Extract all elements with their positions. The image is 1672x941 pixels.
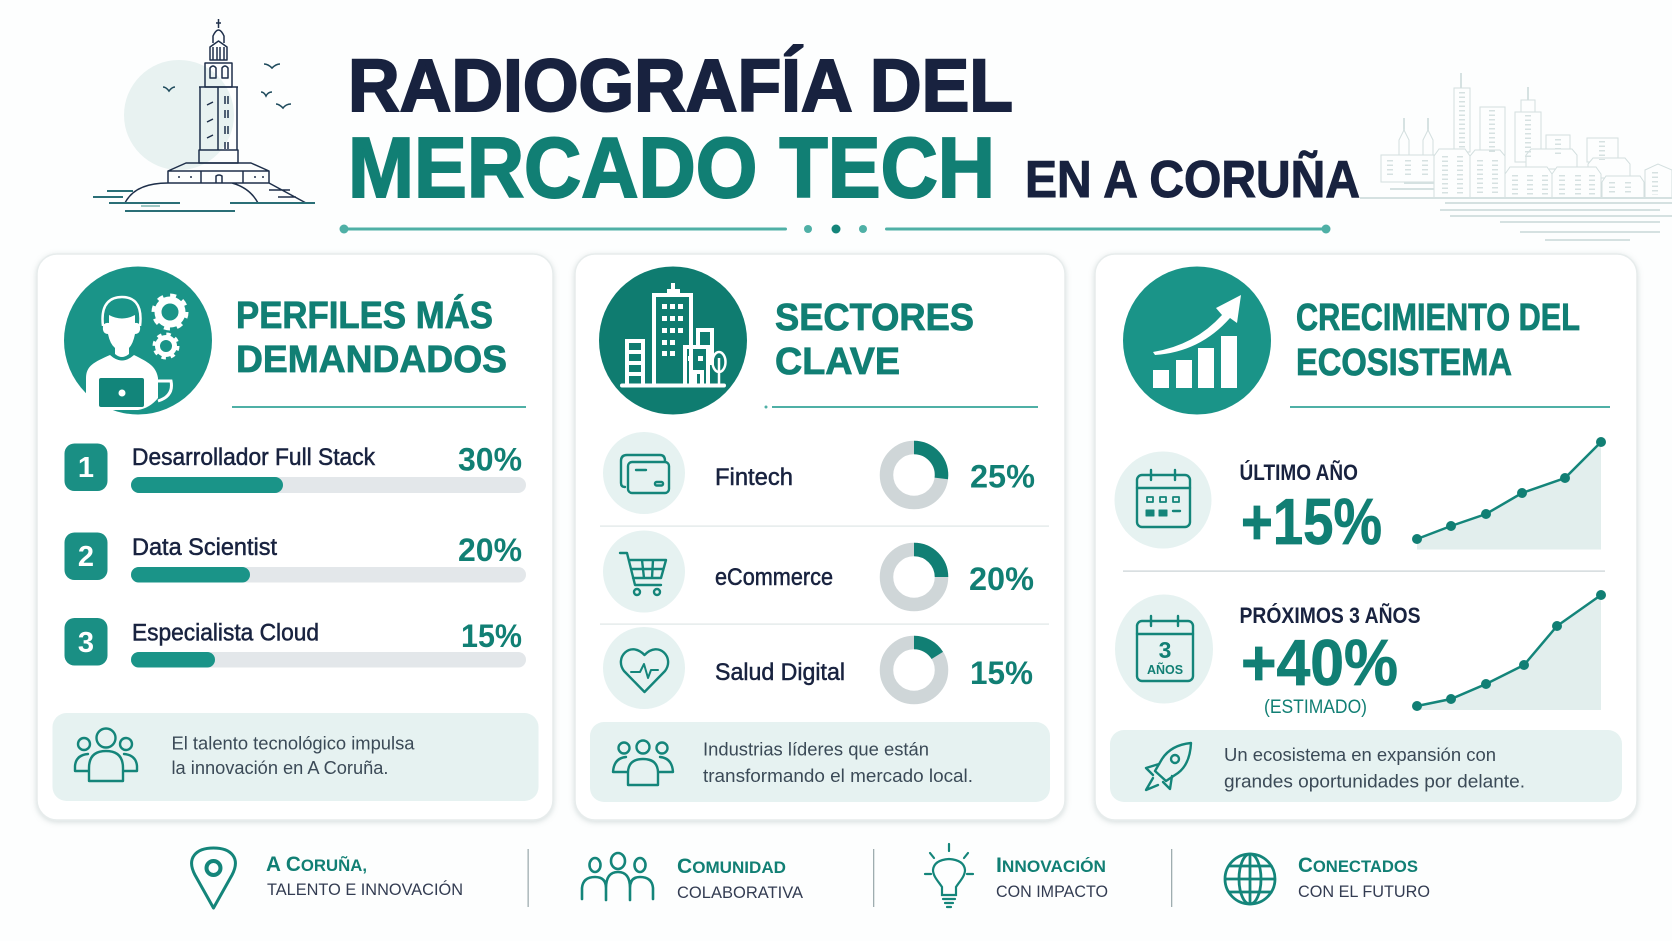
footer — [192, 844, 1430, 908]
profile row 1 — [64, 442, 526, 493]
sector row: Salud Digital: 15% — [970, 655, 1033, 691]
profile row 3: 3 — [78, 627, 94, 659]
callout: ecosistema: grandes oportunidades por delante. — [1224, 772, 1525, 792]
panel heading: DEMANDADOS — [236, 339, 507, 381]
sector row: Salud Digital: Salud Digital — [715, 659, 845, 686]
footer item: A Coruña: TALENTO E INNOVACIÓN — [267, 880, 463, 899]
profile row 2: 2 — [78, 541, 94, 573]
icon: Torre de Hércules lighthouse illustration — [93, 19, 315, 211]
growth row: próximos 3 años: (ESTIMADO) — [1264, 697, 1367, 718]
icon: location pin — [192, 848, 235, 908]
icon: heart with pulse — [621, 649, 668, 692]
sector row: Fintech: 25% — [970, 458, 1035, 494]
panel heading: PERFILES MÁS — [236, 293, 493, 337]
callout: talento: la innovación en A Coruña. — [172, 758, 388, 778]
panel heading — [1296, 297, 1580, 384]
profile row 1: 1 — [78, 452, 94, 484]
footer item: Innovación — [925, 844, 1108, 907]
profile row 2: Data Scientist — [132, 534, 277, 561]
icon: globe — [1225, 854, 1275, 904]
callout: industrias: Industrias líderes que están — [703, 740, 929, 760]
profile row 3: 15% — [461, 618, 522, 654]
panel heading — [775, 297, 974, 383]
growth row: próximos 3 años: +40% — [1241, 626, 1398, 699]
sector row: eCommerce: eCommerce — [715, 564, 833, 591]
icon: city buildings — [599, 266, 747, 414]
sector row: Fintech: Fintech — [715, 464, 793, 491]
icon: calendar — [1137, 470, 1190, 527]
panel heading: SECTORES — [775, 297, 974, 339]
footer item: Innovación: CON IMPACTO — [996, 882, 1108, 901]
icon: rocket — [1146, 743, 1191, 790]
sector row: eCommerce — [603, 530, 1034, 612]
growth row: último año: ÚLTIMO AÑO — [1240, 460, 1358, 485]
title line 1: RADIOGRAFÍA DEL — [348, 44, 1013, 127]
icon: developer with laptop and gears — [64, 266, 212, 414]
footer item: Conectados: CONECTADOS — [1298, 854, 1418, 877]
callout: ecosistema — [1110, 730, 1622, 802]
callout: industrias: transformando el mercado local. — [703, 766, 973, 786]
growth row: próximos 3 años: 3 — [1159, 637, 1171, 663]
profile row 2 — [64, 532, 526, 582]
callout: ecosistema: Un ecosistema en expansión con — [1224, 745, 1496, 765]
footer item: A Coruña: A CORUÑA, — [266, 853, 367, 876]
profile row 1: Desarrollador Full Stack — [132, 444, 376, 471]
panel: sectores clave — [575, 254, 1065, 820]
footer item: Comunidad: COMUNIDAD — [677, 855, 786, 878]
footer item: Innovación: INNOVACIÓN — [996, 854, 1106, 877]
title — [348, 44, 1360, 216]
panel heading — [236, 293, 507, 381]
panel heading: CLAVE — [775, 341, 900, 383]
icon: community — [582, 853, 653, 900]
footer item: Comunidad: COLABORATIVA — [677, 883, 804, 902]
footer item: Comunidad — [582, 853, 804, 902]
skyline illustration — [1360, 73, 1672, 240]
growth row: próximos 3 años: PRÓXIMOS 3 AÑOS — [1240, 603, 1420, 628]
footer item: A Coruña — [192, 848, 463, 908]
icon: people — [613, 740, 673, 785]
icon: credit cards — [621, 455, 669, 493]
profile row 2: 20% — [458, 532, 522, 568]
callout: talento: El talento tecnológico impulsa — [172, 734, 416, 754]
panel heading: CRECIMIENTO DEL — [1296, 297, 1580, 339]
icon: light bulb — [925, 844, 973, 907]
panel: perfiles más demandados — [37, 254, 553, 820]
sector row: eCommerce: 20% — [969, 561, 1034, 597]
area chart: último año — [1412, 437, 1606, 550]
icon: people — [75, 728, 137, 781]
footer item: Conectados: CON EL FUTURO — [1298, 882, 1430, 901]
profile row 3: Especialista Cloud — [132, 620, 319, 646]
profile row 1: 30% — [458, 442, 522, 478]
title line 2: MERCADO TECH — [348, 121, 995, 216]
area chart: próximos 3 años — [1412, 590, 1606, 711]
growth row: próximos 3 años: AÑOS — [1147, 662, 1183, 677]
title line 3: EN A CORUÑA — [1025, 150, 1360, 209]
panel: crecimiento del ecosistema — [1095, 254, 1637, 820]
growth row: último año: +15% — [1241, 485, 1382, 558]
sector row: Fintech — [603, 432, 1035, 514]
growth row: próximos 3 años — [1115, 590, 1606, 718]
footer item: Conectados — [1225, 854, 1430, 904]
growth row: último año — [1114, 437, 1606, 558]
callout: industrias — [590, 722, 1050, 802]
profile row 3 — [64, 618, 526, 668]
panel heading: ECOSISTEMA — [1296, 342, 1512, 384]
callout: talento — [52, 713, 538, 801]
icon: calendar 3 años — [1137, 616, 1193, 681]
sector row: Salud Digital — [603, 627, 1033, 709]
icon: growth bars and arrow — [1123, 266, 1271, 414]
title divider — [340, 224, 1330, 234]
icon: shopping cart — [620, 553, 666, 595]
